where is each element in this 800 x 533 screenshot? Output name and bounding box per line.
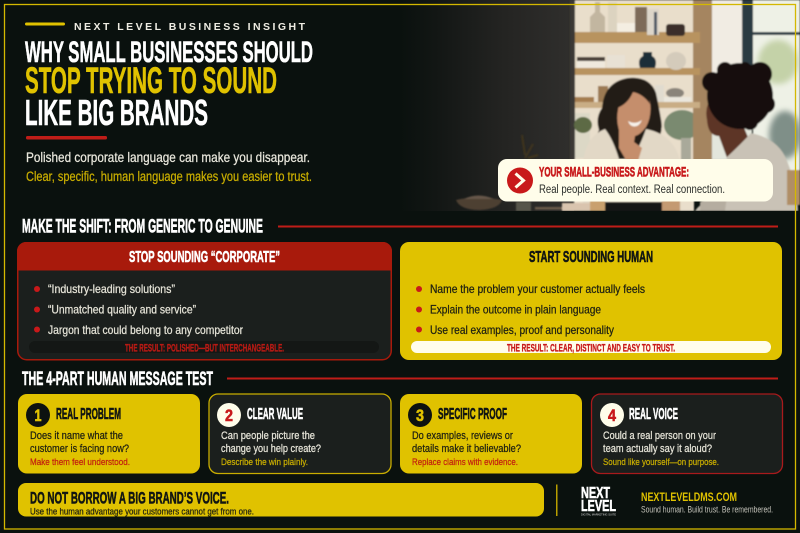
corporate phrases list: Jargon that could belong to any competitor bbox=[48, 323, 243, 337]
title: LIKE BIG BRANDS bbox=[25, 92, 208, 133]
number badge 1 bbox=[26, 403, 50, 427]
number badge 4: 4 bbox=[608, 406, 616, 425]
card 3: specific proof: Do examples, reviews or bbox=[412, 430, 513, 442]
card 2: clear value bbox=[209, 394, 391, 474]
hero photo: two people talking in a shop bbox=[400, 0, 800, 211]
callout: small-business advantage: YOUR SMALL-BUSINESS ADVANTAGE: bbox=[539, 164, 689, 180]
callout: small-business advantage bbox=[498, 159, 773, 202]
logo: next level: NEXT bbox=[581, 485, 610, 502]
card 1: real problem: REAL PROBLEM bbox=[56, 406, 121, 423]
eyebrow: NEXT LEVEL BUSINESS INSIGHT bbox=[74, 21, 306, 33]
result bar: THE RESULT: CLEAR, DISTINCT AND EASY TO TRUST. bbox=[507, 342, 675, 354]
title rule bbox=[26, 136, 107, 140]
intro text bbox=[26, 149, 312, 184]
card 2: clear value: Can people picture the bbox=[221, 430, 315, 442]
result bar: THE RESULT: POLISHED—BUT INTERCHANGEABLE. bbox=[125, 342, 284, 354]
closing banner: DO NOT BORROW A BIG BRAND’S VOICE. bbox=[30, 488, 229, 508]
intro text: Clear, specific, human language makes you easier to trust. bbox=[26, 169, 312, 184]
card 4: real voice: team actually say it aloud? bbox=[603, 443, 712, 455]
corporate phrases list: “Unmatched quality and service” bbox=[48, 302, 196, 316]
logo: next level: LEVEL bbox=[581, 498, 616, 515]
title: WHY SMALL BUSINESSES SHOULD bbox=[25, 36, 313, 69]
card 2: clear value: CLEAR VALUE bbox=[247, 406, 303, 423]
closing banner bbox=[18, 483, 544, 518]
website and tagline bbox=[641, 492, 773, 514]
logo: next level bbox=[581, 485, 616, 516]
title: STOP TRYING TO SOUND bbox=[25, 59, 277, 101]
section heading: 4-part test: THE 4-PART HUMAN MESSAGE TEST bbox=[22, 369, 213, 390]
corporate phrases list bbox=[34, 282, 243, 337]
card 4: real voice: Sound like yourself—on purpose. bbox=[603, 457, 719, 468]
card 1: real problem: customer is facing now? bbox=[30, 443, 129, 455]
card 3: specific proof: Replace claims with evidence. bbox=[412, 457, 518, 468]
card 1: real problem: Does it name what the bbox=[30, 430, 123, 442]
section heading: make the shift: MAKE THE SHIFT: FROM GENERIC TO GENUINE bbox=[22, 216, 263, 238]
number badge 2: 2 bbox=[225, 406, 233, 425]
footer divider bbox=[556, 484, 558, 516]
result bar bbox=[411, 341, 771, 354]
corporate phrases list: “Industry-leading solutions” bbox=[48, 282, 175, 296]
card 1: real problem: Make them feel understood. bbox=[30, 457, 130, 468]
human phrases list: Use real examples, proof and personality bbox=[430, 323, 614, 337]
man's face and neck bbox=[706, 104, 748, 158]
number badge 4 bbox=[600, 403, 624, 427]
card 2: clear value: change you help create? bbox=[221, 443, 321, 455]
card 3: specific proof: details make it believable? bbox=[412, 443, 521, 455]
result bar bbox=[29, 341, 379, 354]
panel: stop sounding corporate: STOP SOUNDING “CORPORATE” bbox=[129, 249, 280, 266]
woman's hair bbox=[595, 78, 662, 160]
panel: start sounding human: START SOUNDING HUMAN bbox=[529, 249, 653, 266]
man's hair bbox=[707, 63, 773, 129]
number badge 2 bbox=[217, 403, 241, 427]
icon: red chevron bbox=[507, 168, 533, 194]
number badge 3: 3 bbox=[416, 406, 424, 425]
closing banner: Use the human advantage your customers cannot get from one. bbox=[30, 506, 254, 518]
number badge 3 bbox=[408, 403, 432, 427]
human phrases list bbox=[416, 282, 645, 337]
card 3: specific proof bbox=[400, 394, 582, 474]
number badge 1: 1 bbox=[34, 406, 42, 425]
intro text: Polished corporate language can make you disappear. bbox=[26, 149, 310, 165]
website and tagline: NEXTLEVELDMS.COM bbox=[641, 492, 737, 504]
card 4: real voice: REAL VOICE bbox=[629, 406, 678, 423]
human phrases list: Explain the outcome in plain language bbox=[430, 302, 601, 316]
human phrases list: Name the problem your customer actually feels bbox=[430, 282, 645, 296]
logo: next level: DIGITAL MARKETING SUITE bbox=[581, 512, 616, 516]
card 1: real problem bbox=[18, 394, 200, 474]
card 4: real voice: Could a real person on your bbox=[603, 430, 716, 442]
card 4: real voice bbox=[592, 394, 782, 474]
title bbox=[25, 36, 313, 133]
card 2: clear value: Describe the win plainly. bbox=[221, 457, 308, 468]
callout: small-business advantage: Real people. Real context. Real connection. bbox=[539, 184, 725, 196]
panel: start sounding human bbox=[400, 242, 782, 360]
panel: stop sounding corporate bbox=[17, 242, 392, 360]
card 3: specific proof: SPECIFIC PROOF bbox=[438, 406, 507, 423]
